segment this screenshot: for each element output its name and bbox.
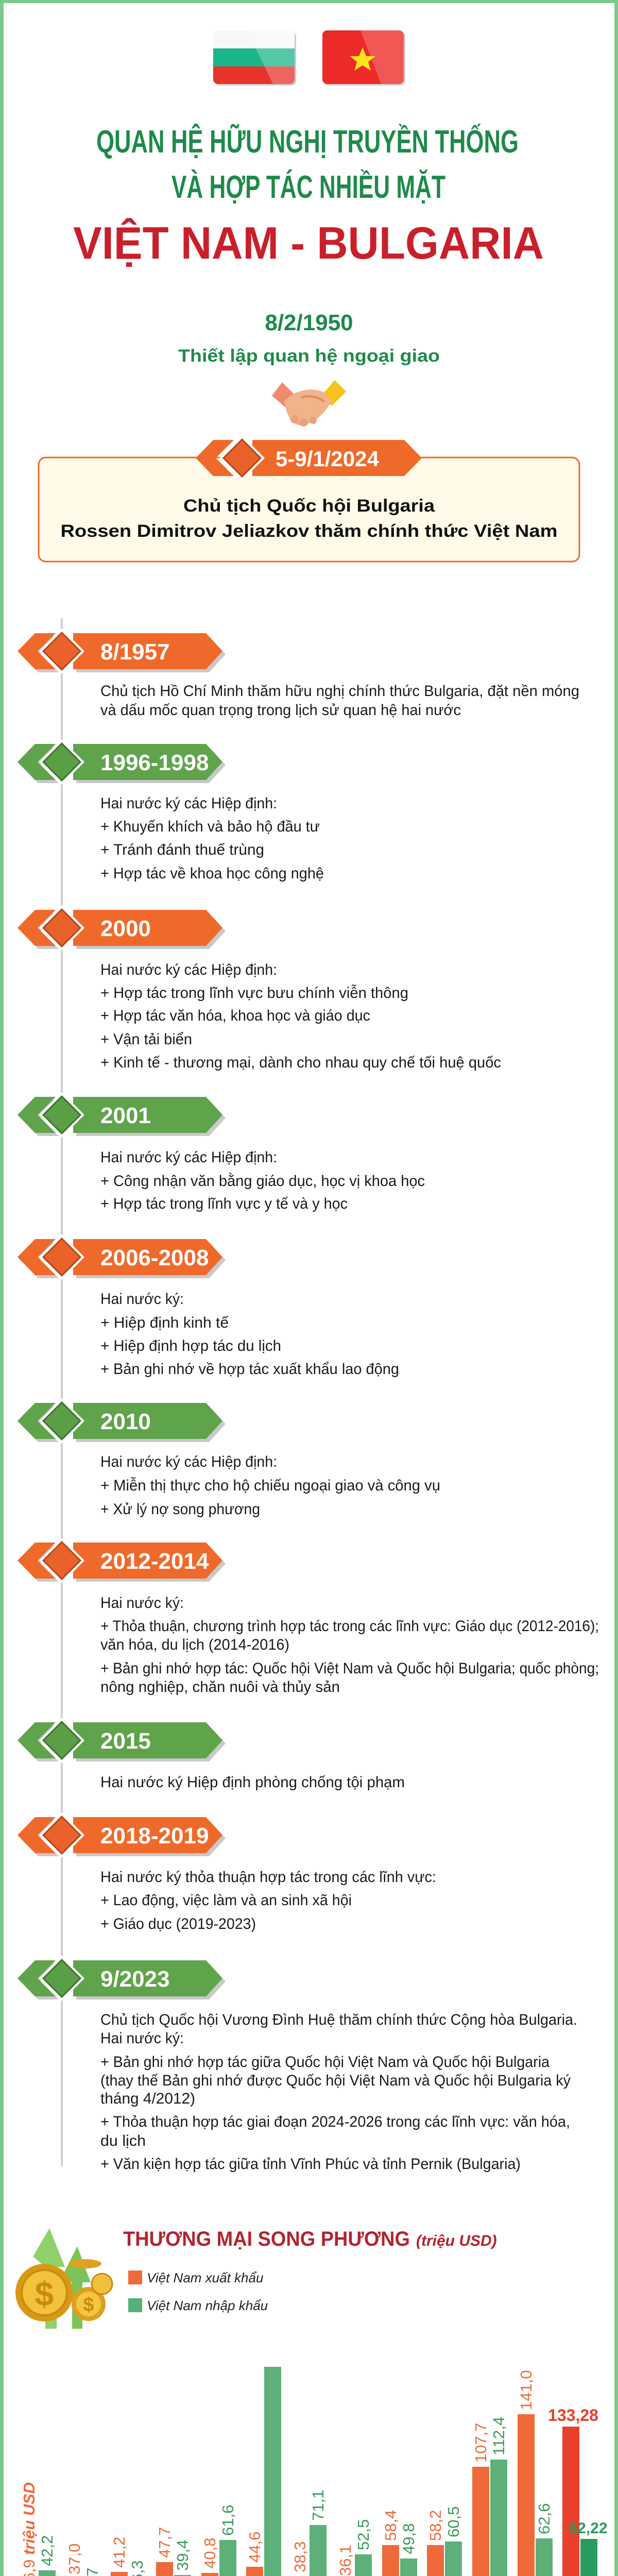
milestone: 8/1957 <box>18 629 579 719</box>
milestone: 1996-1998: Hai nước ký các Hiệp định: <box>100 795 277 812</box>
milestone: 2012-2014: 2012-2014 <box>100 1549 209 1574</box>
panel: 2024 visit: Chủ tịch Quốc hội Bulgaria <box>183 496 435 516</box>
panel: 2024 visit: Rossen Dimitrov Jeliazkov thăm chính thức Việt Nam <box>61 521 557 541</box>
bar chart: 71,1 <box>309 2490 327 2521</box>
value labels: 40,8 <box>201 2538 219 2569</box>
milestone: 2006-2008: 2006-2008 <box>100 1245 209 1270</box>
bar chart: 52,5 <box>354 2519 372 2550</box>
milestone: 2010: 2010 <box>100 1409 151 1434</box>
bar chart: 42,2 <box>38 2535 56 2566</box>
milestone: 1996-1998: 1996-1998 <box>100 750 209 775</box>
timeline line <box>61 618 63 2166</box>
date 1950 <box>178 310 440 366</box>
icon: coins with arrows: $ <box>83 2294 94 2316</box>
value labels: 37,0 <box>65 2544 83 2574</box>
milestone: 2010: + Miễn thị thực cho hộ chiếu ngoại giao và công vụ <box>100 1477 440 1494</box>
bar chart: 133,28 <box>548 2406 598 2425</box>
bar chart: 61,6 <box>219 2505 237 2536</box>
milestone: 9/2023: tháng 4/2012) <box>100 2090 195 2107</box>
value labels: 38,3 <box>291 2541 309 2572</box>
milestone: 2018-2019: Hai nước ký thỏa thuận hợp tác trong các lĩnh vực: <box>100 1869 436 1886</box>
milestone: 2012-2014: văn hóa, du lịch (2014-2016) <box>100 1636 289 1653</box>
milestone: 2000: + Hợp tác văn hóa, khoa học và giáo dục <box>100 1007 370 1024</box>
value labels <box>20 2370 535 2576</box>
flag: Bulgaria <box>213 30 296 86</box>
milestone: 9/2023: (thay thế Bản ghi nhớ được Quốc hội Việt Nam và Quốc hội Bulgaria ký <box>100 2072 571 2089</box>
milestone: 1996-1998: + Hợp tác về khoa học công nghệ <box>100 865 324 882</box>
date 1950: 8/2/1950 <box>265 310 353 335</box>
banner: 5-9/1/2024 <box>196 435 422 481</box>
milestone: 8/1957: Chủ tịch Hồ Chí Minh thăm hữu nghị chính thức Bulgaria, đặt nền móng <box>100 683 579 700</box>
bar chart: 171,0 <box>264 2323 282 2363</box>
bar chart: 39,4 <box>174 2540 192 2571</box>
milestone: 2018-2019: + Lao động, việc làm và an sinh xã hội <box>100 1892 352 1909</box>
milestone: 2000 <box>18 905 501 1071</box>
bar chart: 62,6 <box>535 2503 553 2534</box>
milestone: 8/1957: 8/1957 <box>100 639 170 665</box>
milestone: 2001 <box>18 1092 425 1212</box>
milestone: 1996-1998: + Khuyến khích và bảo hộ đầu tư <box>100 818 320 835</box>
chart title: (triệu USD) <box>416 2232 497 2249</box>
milestone: 2012-2014: nông nghiệp, chăn nuôi và thủy sản <box>100 1679 340 1696</box>
value labels: 47,7 <box>156 2527 174 2558</box>
milestone: 2001: 2001 <box>100 1103 151 1128</box>
milestone: 9/2023: du lịch <box>100 2132 146 2149</box>
milestone: 2010: + Xử lý nợ song phương <box>100 1501 260 1518</box>
legend <box>128 2270 268 2313</box>
milestone: 1996-1998 <box>18 739 324 882</box>
milestone: 2012-2014: Hai nước ký: <box>100 1595 184 1612</box>
milestone: 2000: + Kinh tế - thương mại, dành cho nhau quy chế tối huệ quốc <box>100 1054 501 1071</box>
value labels: 36,1 <box>336 2545 354 2576</box>
milestone: 2010: Hai nước ký các Hiệp định: <box>100 1453 277 1470</box>
milestone: 2015 <box>18 1718 405 1791</box>
bar chart: 49,8 <box>400 2523 418 2554</box>
milestone: 2006-2008: + Bản ghi nhớ về hợp tác xuất khẩu lao động <box>100 1361 399 1378</box>
milestone: 2006-2008: Hai nước ký: <box>100 1291 184 1308</box>
legend: Việt Nam xuất khẩu <box>147 2270 263 2285</box>
bar chart: 112,4 <box>490 2417 508 2455</box>
banner: 5-9/1/2024: 5-9/1/2024 <box>276 447 379 471</box>
milestone: 8/1957: và dấu mốc quan trọng trong lịch sử quan hệ hai nước <box>100 702 461 719</box>
bar chart <box>16 2323 610 2576</box>
milestone: 9/2023: Hai nước ký: <box>100 2030 184 2047</box>
icon: handshake <box>272 380 346 427</box>
chart title: THƯƠNG MẠI SONG PHƯƠNG <box>123 2228 410 2250</box>
value labels: 41,2 <box>110 2537 128 2568</box>
flag: Vietnam <box>322 30 405 86</box>
milestone: 9/2023: + Văn kiện hợp tác giữa tỉnh Vĩnh Phúc và tỉnh Pernik (Bulgaria) <box>100 2156 521 2173</box>
value labels: 58,2 <box>426 2510 444 2541</box>
icon: coins with arrows: $ <box>35 2275 54 2313</box>
milestone: 1996-1998: + Tránh đánh thuế trùng <box>100 841 264 858</box>
panel: 2024 visit <box>39 435 579 562</box>
milestone: 2010 <box>18 1398 440 1518</box>
milestone: 2001: + Hợp tác trong lĩnh vực y tế và y học <box>100 1195 348 1212</box>
value labels: 107,7 <box>472 2422 490 2463</box>
title <box>73 124 544 268</box>
milestone: 2000: Hai nước ký các Hiệp định: <box>100 961 277 978</box>
date 1950: Thiết lập quan hệ ngoại giao <box>178 346 440 366</box>
milestone: 9/2023: + Bản ghi nhớ hợp tác giữa Quốc hội Việt Nam và Quốc hội Bulgaria <box>100 2054 550 2071</box>
milestone: 9/2023: + Thỏa thuận hợp tác giai đoạn 2024-2026 trong các lĩnh vực: văn hóa, <box>100 2113 570 2130</box>
title: VIỆT NAM - BULGARIA <box>73 217 544 268</box>
milestone: 2006-2008 <box>18 1234 399 1378</box>
value labels: 58,4 <box>382 2510 400 2541</box>
milestone: 2018-2019: 2018-2019 <box>100 1823 209 1849</box>
milestone: 9/2023 <box>18 1956 577 2173</box>
milestone: 2018-2019 <box>18 1812 436 1933</box>
title: VÀ HỢP TÁC NHIỀU MẶT <box>171 170 445 205</box>
milestone: 2000: 2000 <box>100 916 151 941</box>
value labels: 44,6 <box>246 2532 264 2563</box>
milestone: 2015: Hai nước ký Hiệp định phòng chống tội phạm <box>100 1774 405 1791</box>
legend: Việt Nam nhập khẩu <box>147 2298 268 2313</box>
milestone: 2006-2008: + Hiệp định kinh tế <box>100 1314 229 1331</box>
milestone: 2012-2014 <box>18 1538 599 1696</box>
bar chart: 60,5 <box>444 2506 462 2537</box>
milestone: 2015: 2015 <box>100 1728 151 1754</box>
milestone: 2000: + Hợp tác trong lĩnh vực bưu chính viễn thông <box>100 985 408 1002</box>
milestone: 2006-2008: + Hiệp định hợp tác du lịch <box>100 1337 281 1354</box>
milestone: 2001: Hai nước ký các Hiệp định: <box>100 1149 277 1166</box>
milestone: 9/2023: 9/2023 <box>100 1967 170 1992</box>
bar chart: 62,22 <box>569 2520 608 2537</box>
milestone: 2012-2014: + Bản ghi nhớ hợp tác: Quốc hội Việt Nam và Quốc hội Bulgaria; quốc phòng; <box>100 1660 599 1677</box>
milestone: 9/2023: Chủ tịch Quốc hội Vương Đình Huệ thăm chính thức Cộng hòa Bulgaria. <box>100 2011 577 2028</box>
value labels: 141,0 <box>517 2370 535 2410</box>
milestone: 2018-2019: + Giáo dục (2019-2023) <box>100 1916 256 1933</box>
icon: coins with arrows <box>15 2228 112 2329</box>
milestone: 2001: + Công nhận văn bằng giáo dục, học vị khoa học <box>100 1173 425 1190</box>
milestone: 2000: + Vận tải biển <box>100 1031 192 1048</box>
